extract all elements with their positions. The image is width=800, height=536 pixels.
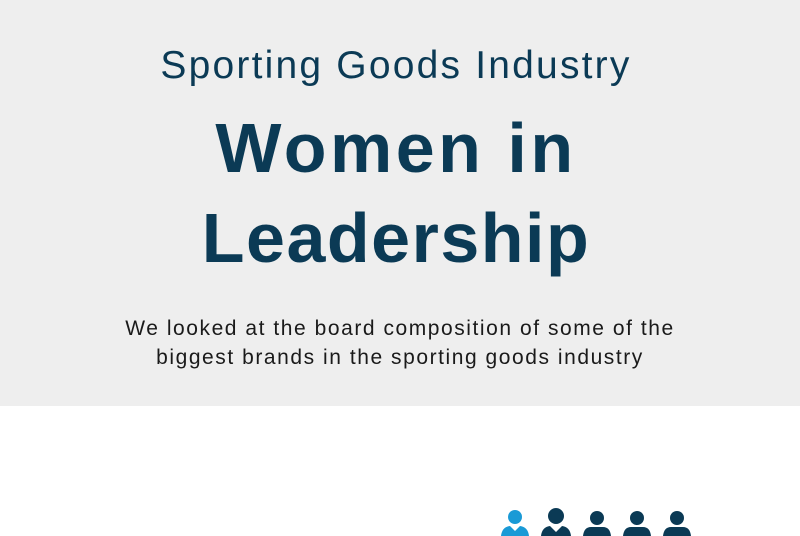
header panel [0, 0, 800, 406]
intro text: We looked at the board composition of some of the [125, 317, 675, 340]
icon: woman blue [501, 510, 529, 536]
icon: person 2 [541, 508, 571, 536]
icon: person 5 [663, 511, 691, 536]
title line 1: Women in [215, 109, 577, 187]
intro text [125, 317, 675, 369]
intro text: biggest brands in the sporting goods industry [156, 346, 644, 369]
subtitle: Sporting Goods Industry [160, 44, 632, 87]
icon: person 3 [583, 511, 611, 536]
icon: person 4 [623, 511, 651, 536]
title line 2: Leadership [202, 199, 590, 277]
